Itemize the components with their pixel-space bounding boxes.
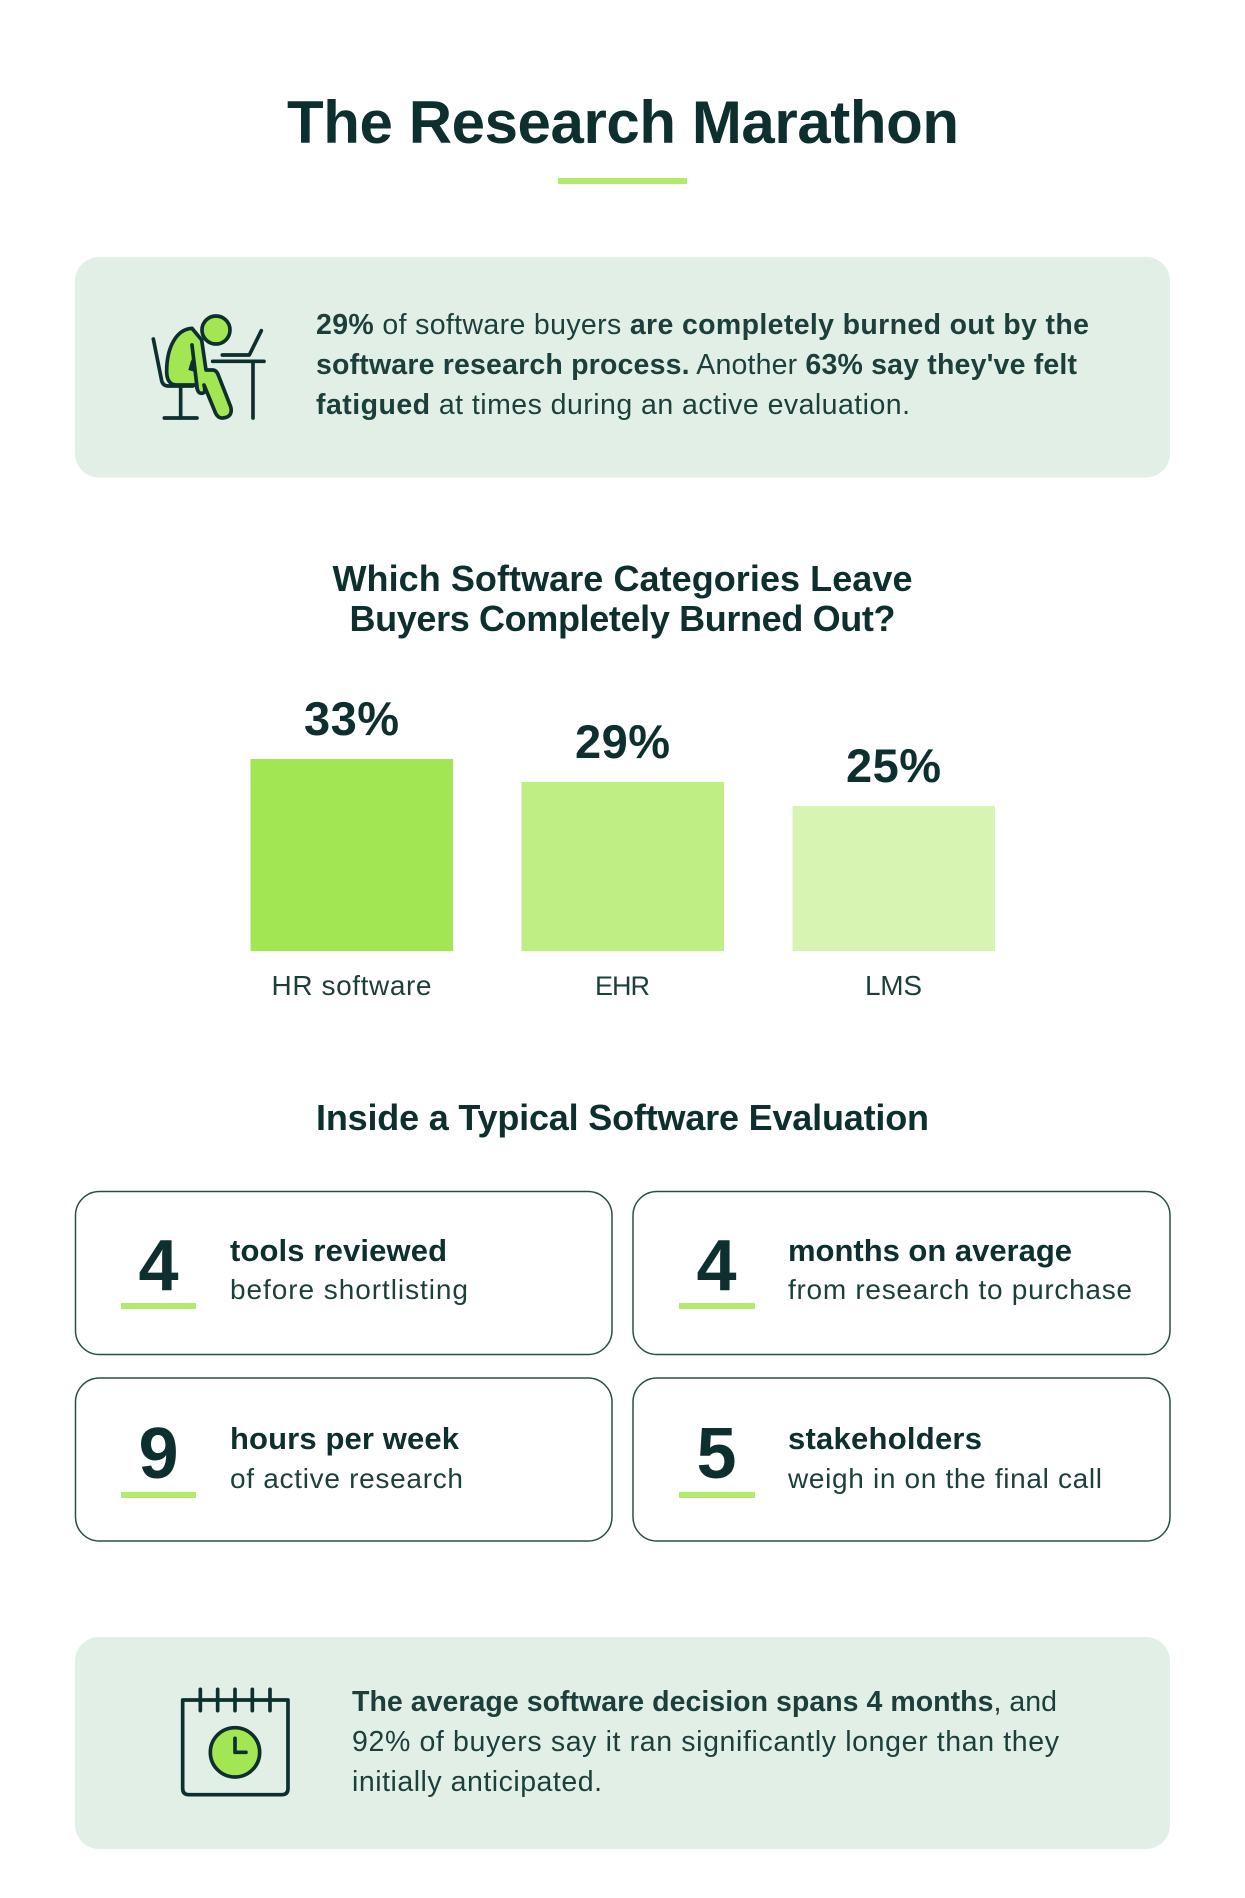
bar: HR software: 33% <box>304 692 399 745</box>
bar: HR software: HR software <box>272 970 432 1001</box>
callout text: fatigued at times during an active evaluation. <box>316 389 910 421</box>
stat card: months on average <box>633 1192 1170 1354</box>
stat card: hours per week <box>76 1378 612 1541</box>
panel: decision timeline callout <box>75 1637 1170 1849</box>
bar: EHR <box>522 715 724 1001</box>
bar: EHR: 29% <box>575 715 670 768</box>
heading: burned out categories: Buyers Completely Burned Out? <box>350 598 896 639</box>
callout text: 92% of buyers say it ran significantly longer than they <box>352 1726 1060 1758</box>
stat card: stakeholders: stakeholders <box>788 1421 982 1456</box>
heading: burned out categories <box>332 558 912 639</box>
callout text: software research process. Another 63% say they've felt <box>316 349 1078 381</box>
callout text: 29% of software buyers are completely burned out by the <box>316 309 1089 341</box>
title underline <box>558 178 687 184</box>
bar: LMS <box>792 739 995 1001</box>
bar: LMS: LMS <box>865 970 922 1001</box>
stat card: stakeholders: weigh in on the final call <box>787 1463 1102 1494</box>
icon: exhausted person at desk <box>153 316 264 418</box>
callout text <box>316 309 1089 421</box>
stat card: tools reviewed: tools reviewed <box>230 1233 447 1268</box>
callout text <box>352 1686 1060 1798</box>
stat card: tools reviewed: before shortlisting <box>230 1274 468 1305</box>
stat card: hours per week: hours per week <box>230 1421 460 1456</box>
icon: calendar with clock <box>183 1689 288 1795</box>
stat card: months on average: months on average <box>788 1233 1072 1268</box>
callout text: The average software decision spans 4 months, and <box>352 1686 1057 1718</box>
stat card: tools reviewed: 4 <box>138 1226 179 1306</box>
bar: HR software <box>250 692 453 1001</box>
stat card: tools reviewed <box>76 1192 612 1354</box>
stat card: hours per week: of active research <box>230 1463 463 1494</box>
stat card: stakeholders <box>633 1378 1170 1541</box>
title: The Research Marathon <box>287 89 959 156</box>
callout text: initially anticipated. <box>352 1766 602 1798</box>
panel: burnout callout <box>75 257 1170 478</box>
stat card: hours per week: 9 <box>138 1414 179 1494</box>
bar: EHR: EHR <box>595 971 650 1001</box>
heading: typical evaluation: Inside a Typical Software Evaluation <box>316 1097 929 1138</box>
stat card: stakeholders: 5 <box>696 1414 737 1494</box>
stat card: months on average: 4 <box>696 1226 737 1306</box>
bar: LMS: 25% <box>846 739 941 792</box>
bar chart <box>250 692 995 1001</box>
stat card: months on average: from research to purchase <box>788 1274 1132 1305</box>
heading: burned out categories: Which Software Categories Leave <box>332 558 912 599</box>
